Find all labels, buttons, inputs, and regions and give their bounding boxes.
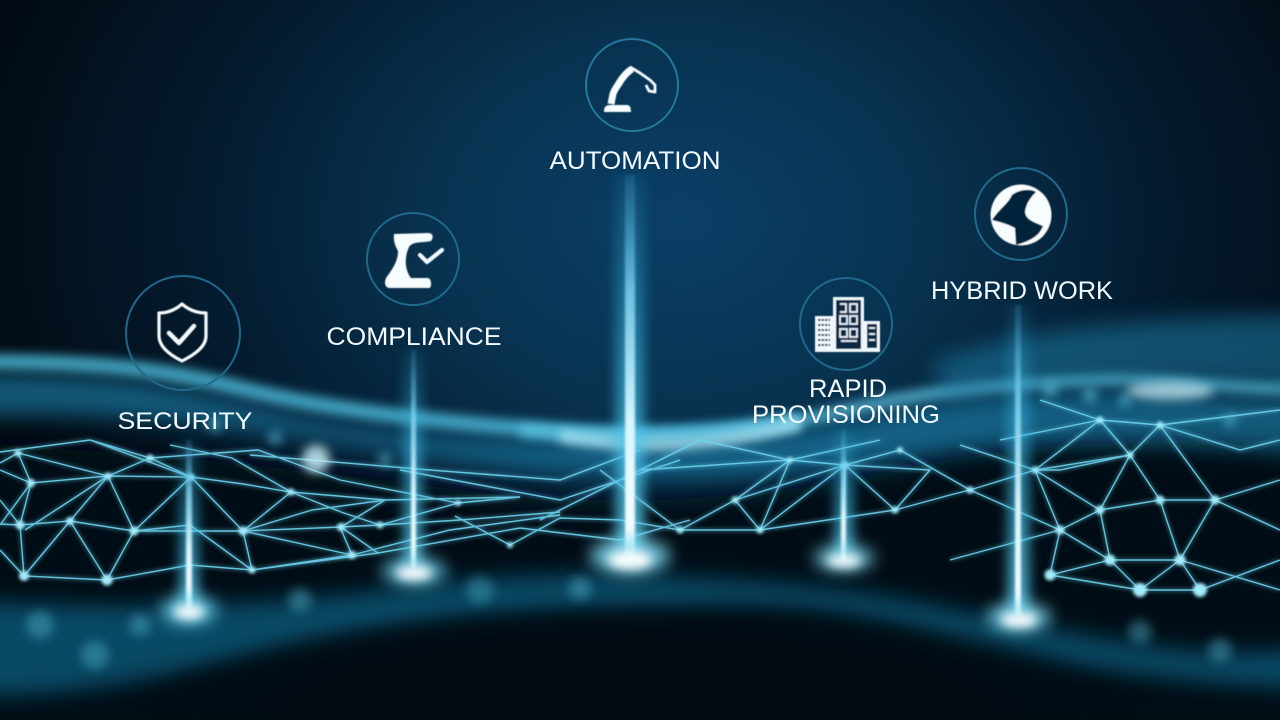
icon circle: hybrid work bbox=[975, 168, 1067, 260]
pillar: hybrid work bbox=[931, 168, 1113, 305]
beam: automation bbox=[590, 175, 670, 574]
icon circle: automation bbox=[586, 39, 678, 131]
pillar: security bbox=[118, 276, 252, 435]
label: automation: AUTOMATION bbox=[550, 147, 720, 175]
beam: security bbox=[161, 440, 217, 625]
out-of-focus lights bbox=[26, 383, 1236, 669]
label: hybrid work: HYBRID WORK bbox=[931, 277, 1113, 305]
bottom vignette bbox=[120, 600, 1160, 720]
beam: compliance bbox=[382, 350, 446, 585]
label: rapid provisioning: PROVISIONING bbox=[752, 401, 940, 429]
icon circle: security bbox=[126, 276, 240, 390]
pillar: compliance bbox=[326, 213, 502, 351]
icon: office buildings bbox=[815, 297, 880, 352]
icon circle: compliance bbox=[367, 213, 459, 305]
glowing network wave bands bbox=[0, 312, 1280, 696]
pillar: rapid provisioning bbox=[752, 278, 940, 429]
label: rapid provisioning bbox=[752, 375, 940, 429]
pillar: automation bbox=[550, 39, 720, 175]
label: compliance: COMPLIANCE bbox=[326, 323, 502, 351]
network mesh bbox=[0, 400, 1280, 590]
label: rapid provisioning: RAPID bbox=[809, 375, 887, 403]
label: security: SECURITY bbox=[118, 408, 252, 435]
icon circle: rapid provisioning bbox=[800, 278, 892, 370]
light beams bbox=[161, 175, 1051, 631]
network nodes bbox=[14, 416, 1220, 597]
icon: robot arm with check bbox=[385, 233, 442, 288]
icon: shield with check bbox=[159, 304, 206, 361]
beam: rapid provisioning bbox=[814, 430, 874, 571]
icon: globe bbox=[990, 184, 1052, 246]
beam: hybrid work bbox=[987, 305, 1051, 631]
dark underside of mesh bbox=[0, 440, 1280, 720]
icon: robot arm bbox=[604, 67, 655, 112]
